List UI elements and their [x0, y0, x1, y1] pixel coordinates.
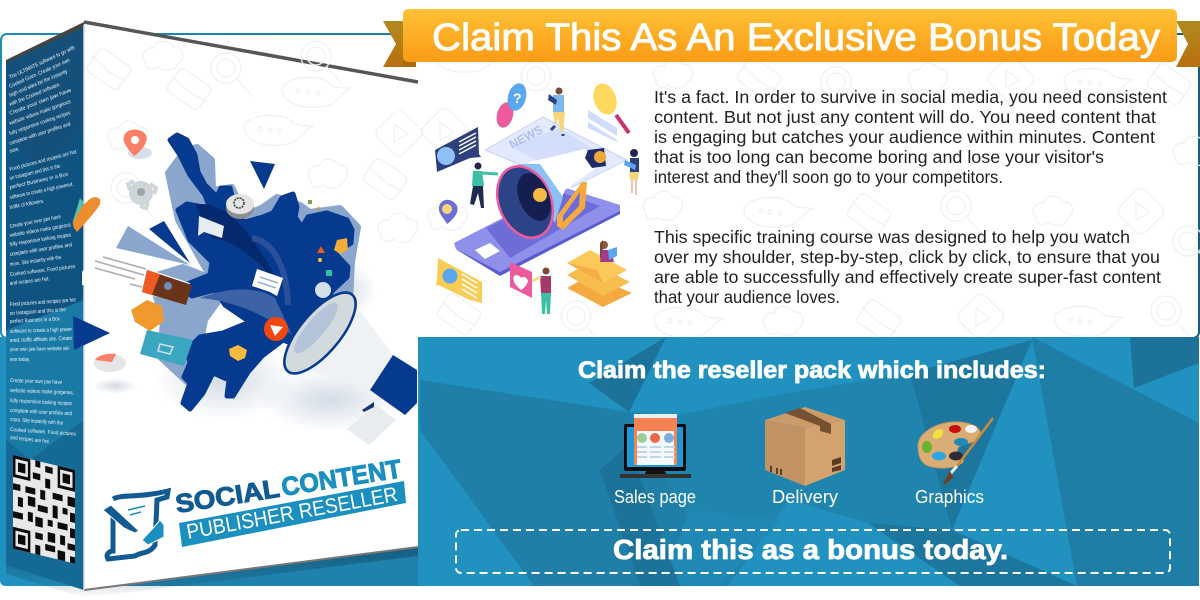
spine text: high-end sites be the instantly	[8, 69, 69, 99]
logo: reseller band: PUBLISHER RESELLER	[185, 483, 399, 544]
magnifier	[588, 80, 629, 142]
person: right	[624, 149, 639, 195]
box shadow	[6, 547, 418, 598]
spine text: Create your own jaw have	[10, 378, 62, 386]
QR code	[13, 455, 75, 564]
spine text: website videos make gorgeous,	[9, 388, 75, 396]
heading text: Claim This As An Exclusive Bonus Today	[432, 17, 1160, 59]
spine text: fully responsive looking recipes	[9, 232, 72, 248]
text block: intro paragraph: content. But not just any content will do. You need content that	[654, 107, 1156, 127]
spine text: with the Cooked software.	[8, 82, 62, 108]
person: left	[470, 162, 498, 208]
spine text: complete with user profiles and	[9, 121, 71, 147]
spine text: website videos make gorgeous	[8, 222, 72, 239]
spine text: ered, traffic affiliate site. Create	[10, 336, 72, 344]
illustration: blue splash	[170, 135, 352, 409]
logo: wordmark	[173, 453, 404, 519]
call to action: dashed box	[456, 530, 1170, 573]
spine text: traffic of followers.	[9, 198, 45, 211]
spine text: on Instagram and this is the	[9, 164, 61, 182]
text block: course paragraph	[654, 227, 1161, 307]
phone	[454, 187, 620, 276]
spine text	[8, 45, 78, 445]
spine text: Cooked software. Food pictures	[10, 264, 76, 278]
megaphone	[487, 148, 606, 246]
illustration: small hexagon	[229, 345, 247, 361]
envelopes stack	[567, 250, 632, 307]
spine text: perfect Business in a Box	[9, 172, 69, 191]
heart card	[510, 262, 532, 298]
spine text: The ULTIMATE software to go with	[8, 45, 76, 81]
label: graphics: Graphics	[915, 487, 984, 507]
illustration: pie chart	[94, 354, 126, 372]
person: sitting	[600, 240, 617, 262]
person: top	[548, 88, 565, 136]
spine text: fully responsive cooking recipes	[9, 110, 71, 137]
illustration: soft shadows	[93, 260, 400, 432]
illustration: hexagon	[131, 300, 164, 331]
background pattern	[420, 42, 1200, 344]
label: sales page: Sales page	[614, 487, 696, 507]
box front face	[72, 22, 424, 590]
logo: wordmark: CONTENT	[279, 453, 404, 502]
spine text: your own jaw have website vid-	[10, 346, 70, 353]
newspaper: NEWS	[507, 122, 545, 152]
illustration: chat bubbles	[198, 216, 283, 296]
spine text: Food pictures and recipes are hot	[9, 149, 78, 173]
spine text: Create your own jaw have	[9, 214, 61, 230]
spine text: Food pictures and recipes are hot	[10, 297, 76, 308]
spine text: on Instagram and this is the	[10, 307, 66, 317]
panel: white content background	[1, 34, 1199, 338]
spine text: Cooked Gram. Create your own	[8, 58, 71, 90]
speech bubbles: question: ?	[513, 90, 522, 106]
spine text: eos today.	[10, 357, 30, 363]
illustration: triangles	[73, 161, 275, 350]
icon: paint palette	[918, 418, 993, 484]
label: delivery: Delivery	[772, 487, 838, 507]
text block: course paragraph: This specific training course was designed to help you watch	[654, 227, 1130, 247]
illustration: content card	[82, 252, 192, 305]
spine text: more. Site instantly with the	[10, 417, 63, 427]
spine text: Create your own jaw have	[9, 88, 72, 117]
text block: intro paragraph	[654, 87, 1167, 187]
spine text: more.	[9, 146, 20, 155]
illustration: light splash	[150, 147, 358, 382]
spine text: and recipes are hot.	[10, 276, 50, 287]
panel: teal faceted lower background	[0, 337, 1199, 590]
logo: wordmark: SOCIAL	[173, 473, 282, 519]
spine text: website videos make gorgeous	[8, 99, 72, 127]
newspaper	[485, 117, 627, 187]
spine text: Cooked software. Food pictures	[10, 427, 76, 438]
spine text: perfect Business in a Box	[10, 316, 60, 325]
ribbon heading	[383, 9, 1200, 67]
illustration: megaphone	[264, 282, 417, 445]
spine text: software to create a high power	[10, 327, 72, 335]
box spine	[6, 22, 84, 590]
front pattern	[85, 41, 424, 242]
speech bubble: twitter	[435, 127, 481, 172]
3D product box	[6, 22, 424, 598]
spine text: more. Site instantly with the	[9, 255, 62, 268]
icon: delivery box	[765, 407, 845, 486]
illustration: gear	[128, 181, 156, 208]
illustration: location pin	[124, 130, 152, 159]
top illustration: social media megaphone on phone	[435, 80, 639, 314]
spine text: fully responsive looking recipes	[10, 398, 72, 407]
speech bubbles: question	[494, 81, 529, 130]
illustration: orange tag	[72, 197, 100, 232]
illustration: confetti shapes	[308, 200, 348, 276]
heading: reseller pack: Claim the reseller pack which includes:	[578, 357, 1046, 384]
person: bottom	[532, 268, 551, 314]
spine text: complete with user profiles and	[10, 408, 72, 417]
call to action: dashed box: Claim this as a bonus today.	[613, 534, 1008, 565]
text block: course paragraph: that your audience loves.	[654, 287, 840, 307]
text block: intro paragraph: It's a fact. In order to survive in social media, you need consistent	[654, 87, 1167, 107]
text block: intro paragraph: is engaging but catches your audience within minutes. Content	[654, 127, 1155, 147]
illustration: image card	[140, 330, 193, 366]
illustration: gray dial	[226, 194, 254, 219]
spine text: complete with user profiles and	[9, 242, 73, 258]
icon: sales page monitor	[620, 414, 691, 478]
pin	[439, 200, 458, 224]
text block: course paragraph: are able to successfully and effectively create super-fast content	[654, 267, 1161, 287]
text block: intro paragraph: interest and they'll soon go to your competitors.	[654, 167, 1003, 187]
text block: intro paragraph: that is too long can become boring and lose your visitor's	[654, 147, 1104, 167]
logo: scroll icon	[103, 491, 168, 559]
text block: course paragraph: over my shoulder, step-by-step, click by click, to ensure that you	[654, 247, 1160, 267]
spine text: software to create a high powered,	[9, 181, 74, 201]
spine text: and recipes are hot.	[10, 435, 50, 445]
like bubble	[436, 258, 482, 303]
illustration: splash folds	[195, 204, 292, 335]
